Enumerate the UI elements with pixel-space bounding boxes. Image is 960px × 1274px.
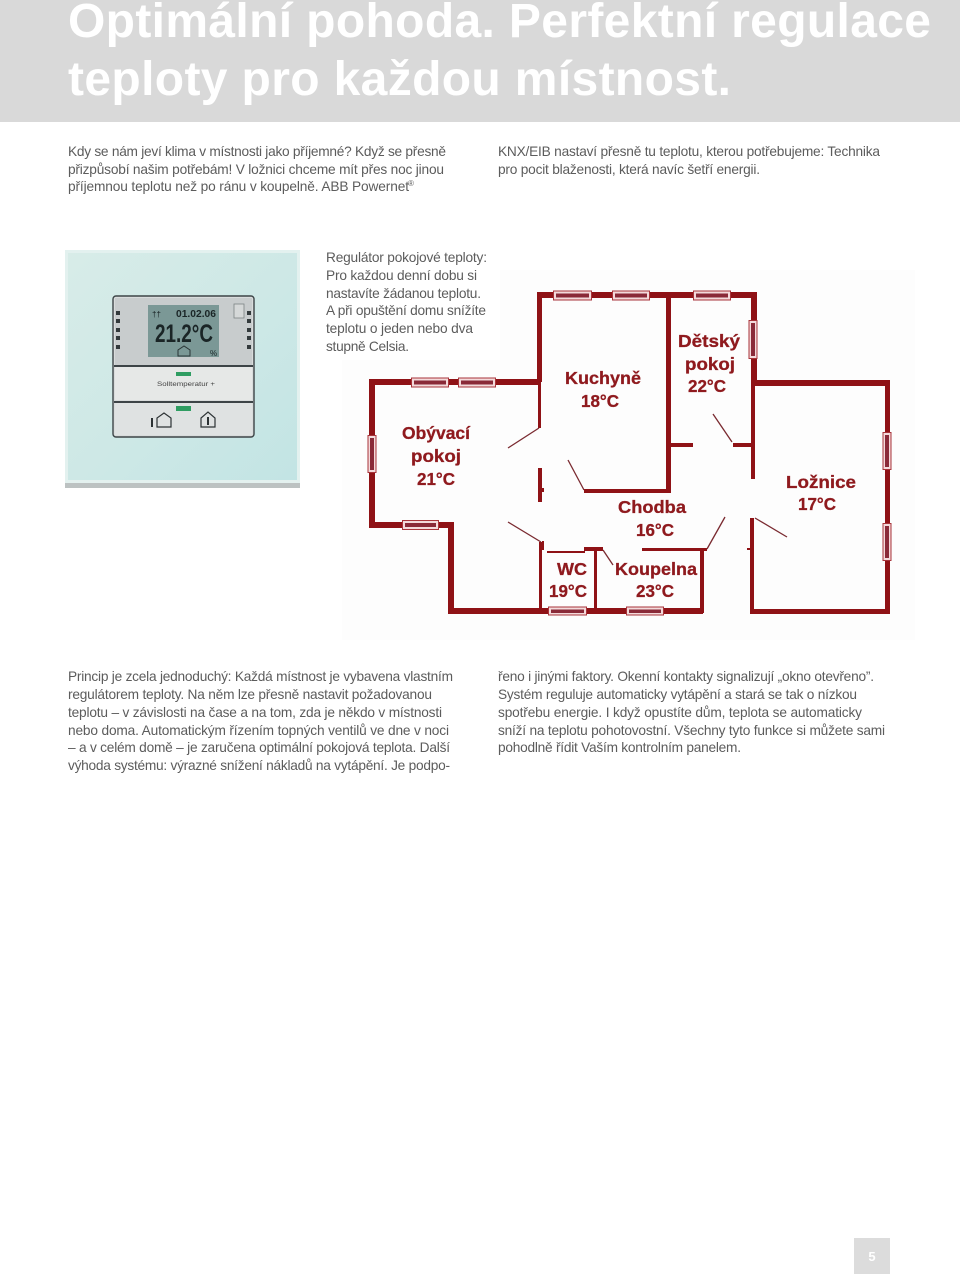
floor plan (342, 270, 915, 640)
room label: children's room (678, 331, 740, 396)
room label: WC (549, 559, 587, 601)
body text right column (498, 669, 885, 755)
LCD display: †† (152, 310, 161, 319)
room label: hallway: Chodba (618, 497, 686, 517)
button icons (152, 412, 215, 427)
room label: children's room: Dětský (678, 331, 740, 351)
photo: room thermostat (65, 250, 300, 488)
thermostat caption: A při opuštění domu snížíte (326, 303, 486, 318)
body text right column: pohodlně řídit Vaším kontrolním panelem. (498, 740, 741, 755)
body text left column: teplotu – v závislosti na čase a na tom, zda je někdo v místnosti (68, 705, 442, 720)
walls (369, 292, 890, 614)
intro text right column: pro pocit blaženosti, která navíc šetří energii. (498, 162, 760, 177)
room label: living room: Obývací (402, 423, 471, 443)
LCD display: 01.02.06 (176, 309, 216, 320)
body text right column: Systém reguluje automaticky vytápění a stará se tak o nízkou (498, 687, 857, 702)
page number: 5 (868, 1249, 876, 1264)
body text right column: sníží na teplotu pohotovostní. Všechny tyto funkce si můžete sami (498, 723, 885, 738)
room label: kitchen: Kuchyně (565, 368, 641, 388)
room label: children's room: pokoj (685, 354, 735, 374)
doors (508, 414, 787, 565)
body text left column: nebo doma. Automatickým řízením topných ventilů ve dne v noci (68, 723, 449, 738)
room label: living room (402, 423, 471, 489)
room label: bathroom (615, 559, 697, 601)
header band (0, 0, 960, 122)
intro text left column (68, 144, 446, 194)
room label: bathroom: Koupelna (615, 559, 697, 579)
page number (854, 1238, 890, 1274)
room label: bathroom: 23°C (636, 581, 674, 601)
room label: hallway: 16°C (636, 520, 674, 540)
LCD display: 21.2°C (155, 320, 213, 348)
title (68, 0, 931, 106)
side indicator dots (116, 311, 251, 349)
body text right column: řeno i jinými faktory. Okenní kontakty signalizují „okno otevřeno”. (498, 669, 874, 684)
body text left column: výhoda systému: výrazné snížení nákladů na vytápění. Je podpo- (68, 758, 450, 773)
windows (368, 291, 891, 615)
room label: WC: 19°C (549, 581, 587, 601)
room label: kitchen: 18°C (581, 391, 619, 411)
title: teploty pro každou místnost. (68, 53, 731, 106)
body text left column (68, 669, 453, 773)
body text left column: Princip je zcela jednoduchý: Každá místnost je vybavena vlastním (68, 669, 453, 684)
room label: children's room: 22°C (688, 376, 726, 396)
room label: WC: WC (557, 559, 587, 579)
room label: bedroom (786, 472, 856, 514)
room label: living room: 21°C (417, 469, 455, 489)
room label: hallway (618, 497, 686, 540)
room label: kitchen (565, 368, 641, 411)
thermostat device body (113, 296, 254, 437)
room label: bedroom: Ložnice (786, 472, 856, 492)
LCD display (148, 305, 219, 358)
room label: bedroom: 17°C (798, 494, 836, 514)
intro text right column (498, 144, 880, 177)
thermostat caption: Pro každou denní dobu si (326, 268, 477, 283)
setpoint button label: Solltemperatur + (157, 381, 215, 388)
intro text left column: Kdy se nám jeví klima v místnosti jako příjemné? Když se přesně (68, 144, 446, 159)
body text left column: – a v celém domě – je zaručena optimální pokojová teplota. Další (68, 740, 450, 755)
body text right column: spotřebu energie. I když opustíte dům, teplota se automaticky (498, 705, 862, 720)
intro text left column: příjemnou teplotu než po ránu v koupelně. ABB Powernet (68, 179, 409, 194)
thermostat caption: Regulátor pokojové teploty: (326, 250, 487, 265)
room label: living room: pokoj (411, 446, 461, 466)
thermostat caption (326, 250, 487, 354)
intro text left column: přizpůsobí našim potřebám! V ložnici chceme mít přes noc jinou (68, 162, 444, 177)
intro text left column: ® (408, 179, 414, 188)
intro text right column: KNX/EIB nastaví přesně tu teplotu, kterou potřebujeme: Technika (498, 144, 880, 159)
thermostat caption: stupně Celsia. (326, 339, 409, 354)
LCD display: % (210, 349, 217, 358)
body text left column: regulátorem teploty. Na něm lze přesně nastavit požadovanou (68, 687, 432, 702)
thermostat caption: nastavíte žádanou teplotu. (326, 286, 481, 301)
thermostat caption: teplotu o jeden nebo dva (326, 321, 473, 336)
